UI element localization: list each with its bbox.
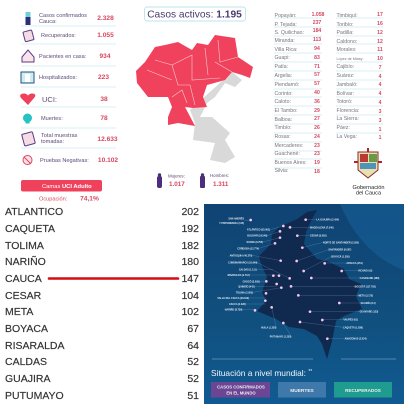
highlight line: Cauca [49,277,178,280]
table: municipalities column 1: S. Quilichao: [274,30,304,36]
table: municipalities column 2: 12 [377,39,383,45]
table: municipalities column 1: Rosas: [274,134,291,140]
row: ocupacion: Ocupación: [39,196,68,202]
row: pruebas negativas: 10.102 [98,157,118,164]
table: departments: 52 [187,373,199,385]
labels: right departments: VICHADA (5) [358,270,373,273]
labels: right departments: ARAUCA (251) [346,262,363,265]
logo: Gobernación del Cauca: Gobernación [352,185,385,191]
legend: mujeres [157,173,185,188]
table: municipalities column 1: Mercaderes: [274,143,303,149]
labels: right departments: META (3.175) [358,294,373,297]
labels: left departments: NARIÑO (8.739) [225,309,243,312]
panel: Colombia map [204,204,404,404]
table: municipalities column 1: 36 [314,99,320,105]
banner: camas UCI: Camas UCI Adulto [42,184,92,190]
table: municipalities column 1: 113 [313,37,321,43]
table: departments: PUTUMAYO [5,390,64,402]
table: municipalities column 2: Timbiquí: [336,13,358,19]
connector lines [242,220,361,339]
banner: camas UCI [21,180,102,192]
row: casos confirmados: 2.328 [97,15,114,22]
heading: situacion mundial: Situación a nivel mundial: [211,368,306,378]
table: municipalities column 1: Silvia: [274,168,288,174]
heading: casos activos: Casos activos: 1.195 [147,10,242,20]
table: departments: CAUCA [5,273,42,285]
table: municipalities column 2: Toribío: [336,22,354,28]
legend: hombres: 1.311 [213,181,229,188]
labels: left departments: CUNDINAMARCA (10.949) [228,262,258,265]
table: municipalities column 1: 71 [314,64,320,70]
table: departments: META [5,306,33,318]
labels: right departments: SANTANDER (5.067) [328,249,351,252]
row: total muestras: 12.633 [97,136,118,143]
table: municipalities column 1: Popayán: [274,13,296,19]
logo: Gobernación del Cauca: del Cauca [356,190,382,196]
table: departments: BOYACA [5,323,48,335]
row: ocupacion: 74,1% [80,196,99,202]
table: departments: 67 [187,323,199,335]
table: municipalities column 1: Balboa: [274,117,292,123]
icon: negative test [23,156,32,164]
icon: house [22,50,34,62]
labels: left departments: CÓRDOBA (12.774) [237,247,259,250]
table: municipalities column 1: 57 [314,81,320,87]
legend: mujeres: 1.017 [169,181,185,188]
table: municipalities column 2: 16 [377,21,383,27]
table: municipalities column 2: 11 [377,47,383,53]
table: municipalities column 1: 24 [314,134,320,140]
table: municipalities column 1: 184 [313,28,321,34]
row: muertes: Muertes: [41,116,63,122]
row: total muestras: Total muestras [41,133,78,139]
row: hospitalizados: Hospitalizados: [39,75,77,81]
row: UCI: 38 [100,96,108,103]
legend: mujeres: Mujeres: [168,174,185,178]
table: municipalities column 1: El Tambo: [274,108,297,114]
labels: right departments: LA GUAJIRA (2.434) [316,219,339,222]
table: municipalities column 1: 237 [313,20,321,26]
icon: test tube [26,12,30,25]
row: ocupacion [39,196,99,202]
labels: left departments: Y PROVIDENCIA (145) [219,222,244,225]
table: municipalities column 1: Argelia: [274,73,292,79]
labels: right departments: CASANARE (389) [360,277,380,280]
table: municipalities column 1: Villa Rica: [274,47,297,53]
labels: right departments: CESAR (3.035) [310,234,327,237]
labels: left departments: VALLE DEL CAUCA (29.819) [217,297,249,300]
table: municipalities column 1 [274,12,325,175]
table: municipalities column 1: 83 [314,55,320,61]
table: municipalities column 1: 23 [314,151,320,157]
labels: left departments: QUINDÍO (442) [238,286,255,289]
labels: left departments: SUCRE (6.705) [246,241,263,244]
panel: statistics list [20,12,118,202]
button: casos confirmados en el mundo: CASOS CONFIRMADOS [217,384,265,390]
table: municipalities column 2: 1 [379,135,382,141]
table: municipalities column 2 [336,12,383,141]
table: municipalities column 2: 12 [377,30,383,36]
labels: left departments: SAN ANDRÉS [228,217,244,220]
table: municipalities column 2: La Vega: [336,134,357,140]
labels: left departments: CHOCÓ (3.593) [243,280,260,283]
labels: left departments: ANTIOQUIA (40.370) [230,254,253,257]
table: municipalities column 1: Guachené: [274,151,300,157]
table: municipalities column 2: Padilla: [336,30,354,36]
icon: heart [20,94,35,105]
table: municipalities column 2: 4 [379,82,382,88]
button: muertes: MUERTES [290,388,315,394]
table: municipalities column 1: 19 [314,160,320,166]
table: municipalities column 1: Timbío: [274,125,292,131]
map: Colombia [257,210,362,359]
icon: clipboard samples [22,132,35,146]
row: recuperados: Recuperados: [41,33,76,39]
row: pacientes en casa: Pacientes en casa: [39,54,87,60]
table: municipalities column 1: Guapi: [274,55,290,61]
table: municipalities column 1: 27 [314,116,320,122]
table: municipalities column 2: 4 [379,74,382,80]
labels: left departments [217,217,292,339]
row: pruebas negativas [40,157,118,164]
table: departments: ATLANTICO [5,206,63,218]
labels: right departments: CAQUETÁ (1.836) [343,326,363,329]
table: departments: CESAR [5,290,42,302]
table: municipalities column 2: La Sierra: [336,116,359,122]
table: departments: 192 [181,223,199,235]
table: departments: 147 [181,273,199,285]
labels: right departments: AMAZONAS (2.524) [345,338,367,341]
table: municipalities column 1: 29 [314,108,320,114]
row: total muestras: tomadas: [41,139,64,145]
labels: right departments: BOGOTÁ (117.792) [355,285,376,288]
table: municipalities column 2: 4 [379,91,382,97]
row: casos confirmados [39,13,114,25]
table: municipalities column 1: Patía: [274,64,288,70]
labels: left departments: BOLÍVAR (19.548) [247,235,268,238]
row: UCI [42,95,108,104]
row: muertes [41,115,108,122]
table: municipalities column 2: Suárez: [336,73,354,79]
labels: right departments: NORTE DE SANTANDER (3.295) [323,241,359,244]
labels: right departments: GUAVIARE (123) [360,311,378,314]
icon: recovered clipboard [23,30,34,42]
table: departments: 202 [181,206,199,218]
table: municipalities column 2: Cajibío: [336,64,354,70]
logo: Gobernación del Cauca [352,148,385,196]
labels: left departments: CALDAS (1.111) [239,269,257,272]
table: departments: 64 [187,340,199,352]
row: total muestras [41,133,118,145]
labels: right departments: VAUPÉS (61) [343,319,358,322]
row: hospitalizados [39,74,109,81]
labels: right departments [310,219,380,341]
row: recuperados [41,32,114,39]
table: municipalities column 1: Buenos Aires: [274,160,307,166]
row: recuperados: 1.055 [97,32,114,39]
labels: right departments: MAGDALENA (7.540) [310,226,334,229]
row: pruebas negativas: Pruebas Negativas: [40,158,89,164]
table: municipalities column 1: Piendamó: [274,82,299,88]
labels: left departments: CAUCA (2.328) [229,303,246,306]
button: muertes [278,382,326,398]
table: municipalities column 2: López de Micay: [336,57,363,61]
button: casos confirmados en el mundo: EN EL MUNDO [226,390,256,396]
labels: left departments: TOLIMA (2.053) [236,291,253,294]
row: hospitalizados: 223 [98,74,109,81]
row: UCI: UCI: [42,95,57,104]
table: municipalities column 1: Corinto: [274,91,293,97]
table: municipalities column 2: Caldono: [336,39,357,45]
button: recuperados [334,382,392,398]
table: municipalities column 1: 40 [314,90,320,96]
table: departments: 182 [181,240,199,252]
labels: left departments: RISARALDA (2.712) [228,274,250,277]
icon: hospital [21,72,34,83]
table: municipalities column 1: 94 [314,46,320,52]
table: municipalities column 2: Morales: [336,47,356,53]
table: municipalities column 1: 18 [314,169,320,175]
table: municipalities column 2: Florencia: [336,108,359,114]
labels: right departments: GUAINÍA (14) [361,302,376,305]
table: departments [5,206,199,402]
table: departments: 102 [181,306,199,318]
labels: left departments: HUILA (1.230) [261,327,277,330]
table: municipalities column 2: 17 [377,12,383,18]
table: departments: 180 [181,256,199,268]
table: municipalities column 2: 3 [379,118,382,124]
heading: situacion mundial: ** [308,369,312,375]
button: casos confirmados en el mundo [211,382,270,398]
table: municipalities column 2: Jambaló: [336,82,358,88]
table: municipalities column 2: Bolívar: [336,91,354,97]
row: muertes: 78 [100,115,108,122]
table: municipalities column 1: Caloto: [274,99,291,105]
row: casos confirmados: Cauca: [39,19,57,25]
table: municipalities column 1: 57 [314,72,320,78]
row: pacientes en casa [39,53,111,60]
table: municipalities column 2: 10 [377,56,383,62]
row: casos confirmados: Casos confirmados [39,13,87,19]
city markers [249,218,343,340]
labels: left departments: ATLÁNTICO (35.002) [247,229,270,232]
legend: hombres: Hombres: [210,173,229,178]
labels: left departments: PUTUMAYO (1.255) [270,336,292,339]
labels and markers (3x coordinate group) [217,217,380,341]
button: recuperados: RECUPERADOS [345,388,381,393]
table: municipalities column 1: 1.058 [312,12,325,18]
table: departments: RISARALDA [5,340,65,352]
table: departments: GUAJIRA [5,373,51,385]
table: departments: 104 [181,290,199,302]
table: municipalities column 2: Totoró: [336,99,352,105]
table: municipalities column 1: Miranda: [274,38,295,44]
labels: right departments: BOYACÁ (1.305) [331,256,350,259]
table: departments: CALDAS [5,356,47,368]
table: departments: CAQUETA [5,223,55,235]
table: municipalities column 2: Páez: [336,125,350,131]
table: departments: NARIÑO [5,255,46,268]
map: Cauca department [136,35,253,163]
table: municipalities column 1: P. Tejada: [274,22,297,28]
table: municipalities column 2: 4 [379,100,382,106]
legend: hombres [200,173,229,188]
row: pacientes en casa: 934 [99,53,111,60]
table: municipalities column 1: 23 [314,143,320,149]
table: municipalities column 1: 26 [314,125,320,131]
table: municipalities column 2: 3 [379,109,382,115]
table: municipalities column 2: 7 [379,65,382,71]
table: departments: TOLIMA [5,240,44,252]
table: departments: 52 [187,356,199,368]
table: departments: 51 [187,390,199,402]
icon: skull [23,114,32,124]
table: municipalities column 2: 1 [379,127,382,133]
